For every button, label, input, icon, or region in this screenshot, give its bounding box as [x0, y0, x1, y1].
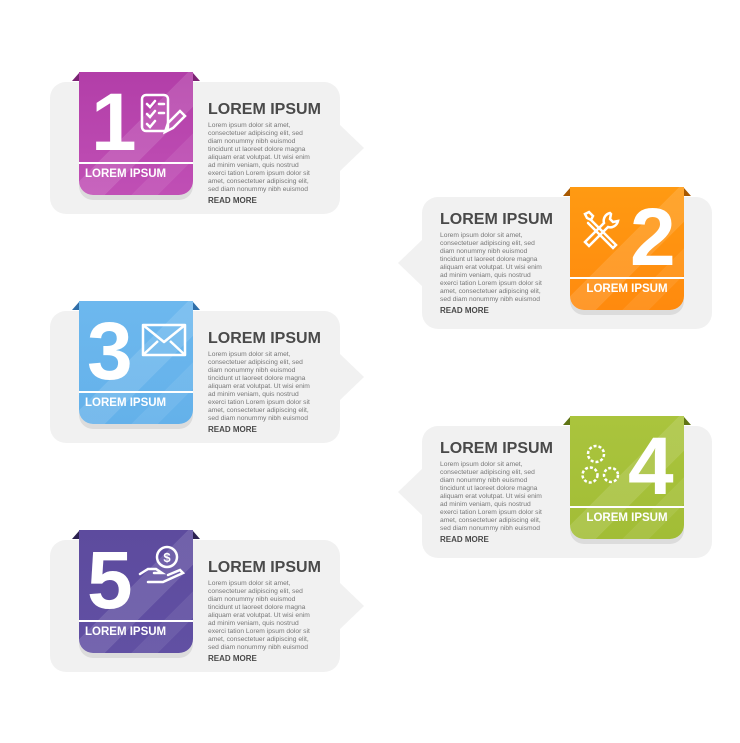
- text 3: tincidunt ut laoreet dolore magna: [208, 375, 305, 382]
- text 3: READ MORE: [208, 425, 257, 434]
- text 1: [208, 101, 321, 205]
- text 4: exerci tation Lorem ipsum dolor sit: [440, 509, 542, 516]
- text 2: LOREM IPSUM: [440, 211, 553, 228]
- text 3: LOREM IPSUM: [208, 330, 321, 347]
- text 1: aliquam erat volutpat. Ut wisi enim: [208, 154, 310, 161]
- text 3: Lorem ipsum dolor sit amet,: [208, 351, 291, 358]
- text 2: READ MORE: [440, 306, 489, 315]
- text 2: exerci tation Lorem ipsum dolor sit: [440, 280, 542, 287]
- text 1: Lorem ipsum dolor sit amet,: [208, 122, 291, 129]
- text 4: [440, 440, 553, 544]
- text 1: sed diam nonummy nibh euismod: [208, 186, 308, 193]
- text 4: amet, consectetuer adipiscing elit,: [440, 517, 541, 524]
- text 4: consectetuer adipiscing elit, sed: [440, 469, 535, 476]
- text 4: Lorem ipsum dolor sit amet,: [440, 461, 523, 468]
- text 3: [208, 330, 321, 434]
- text 2: consectetuer adipiscing elit, sed: [440, 240, 535, 247]
- numeral 4: 4: [628, 421, 674, 512]
- badge 3: LOREM IPSUM: [85, 397, 166, 409]
- badge 4: [570, 416, 684, 539]
- text 4: diam nonummy nibh euismod: [440, 477, 527, 484]
- text 1: ad minim veniam, quis nostrud: [208, 162, 299, 169]
- badge 4: LOREM IPSUM: [586, 512, 668, 524]
- text 5: consectetuer adipiscing elit, sed: [208, 588, 303, 595]
- icon: checklist: [140, 94, 187, 134]
- card 1: [50, 72, 364, 214]
- badge 5: [79, 530, 193, 653]
- text 3: consectetuer adipiscing elit, sed: [208, 359, 303, 366]
- text 2: amet, consectetuer adipiscing elit,: [440, 288, 541, 295]
- icon: money hand: $: [163, 550, 171, 565]
- text 5: exerci tation Lorem ipsum dolor sit: [208, 628, 310, 635]
- text 1: tincidunt ut laoreet dolore magna: [208, 146, 305, 153]
- badge 1: [79, 72, 193, 195]
- text 1: diam nonummy nibh euismod: [208, 138, 295, 145]
- icon: tools: [583, 210, 620, 250]
- text 4: ad minim veniam, quis nostrud: [440, 501, 531, 508]
- text 3: exerci tation Lorem ipsum dolor sit: [208, 399, 310, 406]
- text 2: diam nonummy nibh euismod: [440, 248, 527, 255]
- numeral 5: 5: [87, 535, 133, 626]
- text 4: READ MORE: [440, 535, 489, 544]
- card 2: [398, 187, 712, 329]
- badge 2: [570, 187, 684, 310]
- text 5: diam nonummy nibh euismod: [208, 596, 295, 603]
- numeral 2: 2: [630, 192, 676, 283]
- text 4: aliquam erat volutpat. Ut wisi enim: [440, 493, 542, 500]
- text 1: READ MORE: [208, 196, 257, 205]
- numeral 1: 1: [91, 77, 137, 168]
- text 2: tincidunt ut laoreet dolore magna: [440, 256, 537, 263]
- text 2: sed diam nonummy nibh euismod: [440, 296, 540, 303]
- text 5: aliquam erat volutpat. Ut wisi enim: [208, 612, 310, 619]
- text 2: ad minim veniam, quis nostrud: [440, 272, 531, 279]
- text 4: LOREM IPSUM: [440, 440, 553, 457]
- text 5: READ MORE: [208, 654, 257, 663]
- text 2: Lorem ipsum dolor sit amet,: [440, 232, 523, 239]
- icon: money hand: [138, 546, 186, 584]
- text 1: exerci tation Lorem ipsum dolor sit: [208, 170, 310, 177]
- text 1: LOREM IPSUM: [208, 101, 321, 118]
- text 1: amet, consectetuer adipiscing elit,: [208, 178, 309, 185]
- text 5: ad minim veniam, quis nostrud: [208, 620, 299, 627]
- numeral 3: 3: [87, 306, 133, 397]
- text 2: [440, 211, 553, 315]
- icon: envelope: [142, 324, 186, 356]
- badge 5: LOREM IPSUM: [85, 626, 166, 638]
- text 3: sed diam nonummy nibh euismod: [208, 415, 308, 422]
- text 5: amet, consectetuer adipiscing elit,: [208, 636, 309, 643]
- badge 3: [79, 301, 193, 424]
- text 1: consectetuer adipiscing elit, sed: [208, 130, 303, 137]
- text 5: [208, 559, 321, 663]
- card 3: [50, 301, 364, 443]
- icon: gears: [581, 444, 620, 484]
- text 3: ad minim veniam, quis nostrud: [208, 391, 299, 398]
- text 5: sed diam nonummy nibh euismod: [208, 644, 308, 651]
- text 4: sed diam nonummy nibh euismod: [440, 525, 540, 532]
- text 5: tincidunt ut laoreet dolore magna: [208, 604, 305, 611]
- badge 1: LOREM IPSUM: [85, 168, 166, 180]
- card 5: [50, 530, 364, 672]
- text 5: Lorem ipsum dolor sit amet,: [208, 580, 291, 587]
- text 4: tincidunt ut laoreet dolore magna: [440, 485, 537, 492]
- text 5: LOREM IPSUM: [208, 559, 321, 576]
- text 3: diam nonummy nibh euismod: [208, 367, 295, 374]
- card 4: [398, 416, 712, 558]
- text 2: aliquam erat volutpat. Ut wisi enim: [440, 264, 542, 271]
- text 3: amet, consectetuer adipiscing elit,: [208, 407, 309, 414]
- badge 2: LOREM IPSUM: [586, 283, 668, 295]
- text 3: aliquam erat volutpat. Ut wisi enim: [208, 383, 310, 390]
